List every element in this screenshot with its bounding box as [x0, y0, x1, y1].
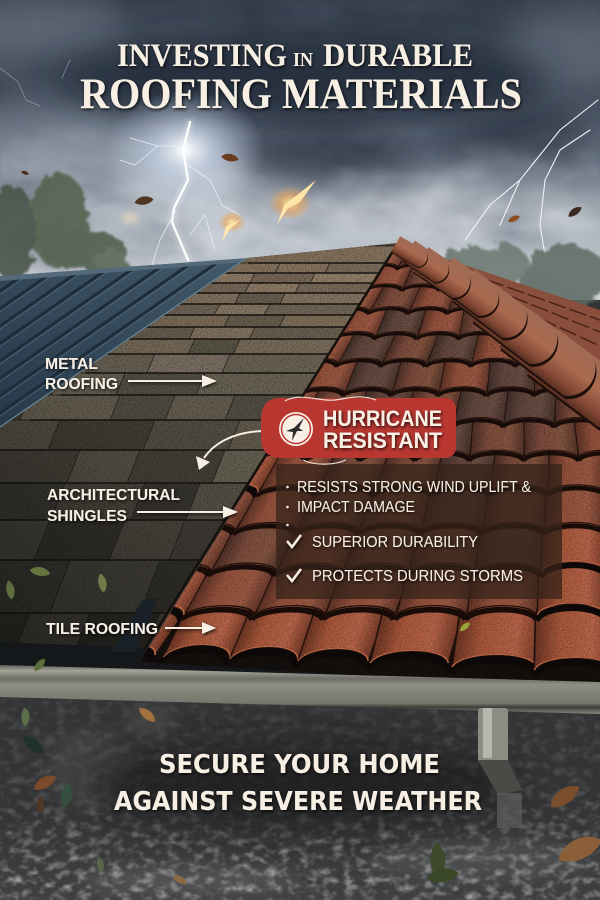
- benefit: protects during storms: PROTECTS DURING STORMS: [312, 568, 523, 585]
- title: DURABLE: [323, 38, 473, 74]
- panel: tile roofing: [140, 254, 600, 682]
- dark eave strip: [0, 598, 600, 690]
- gutter: [0, 665, 600, 714]
- benefit: wind uplift and impact: RESISTS STRONG WIND UPLIFT &: [297, 479, 532, 496]
- title: ROOFING MATERIALS: [80, 71, 522, 118]
- sky background: [0, 0, 600, 300]
- edge between shingles and tiles: [143, 243, 398, 652]
- closing tagline: [114, 750, 482, 817]
- tree left: [0, 172, 130, 280]
- label: metal roofing: ROOFING: [45, 376, 118, 393]
- title: INVESTING: [117, 38, 287, 74]
- far slope tiles behind ridge: [405, 243, 600, 420]
- bottom ground with storm debris: [0, 695, 600, 900]
- panel: architectural shingles: [0, 243, 410, 655]
- label: architectural shingles: SHINGLES: [47, 508, 127, 525]
- label: metal roofing: METAL: [45, 356, 98, 373]
- benefit: wind uplift and impact: IMPACT DAMAGE: [297, 499, 415, 516]
- label: architectural shingles: ARCHITECTURAL: [47, 487, 180, 504]
- label: architectural shingles: [47, 487, 238, 525]
- trees right: [444, 243, 600, 312]
- label: tile roofing: TILE ROOFING: [46, 621, 158, 638]
- label: metal roofing: [45, 356, 217, 393]
- closing tagline: SECURE YOUR HOME: [159, 750, 440, 780]
- glowing lightning strikes: [121, 180, 316, 242]
- benefit: wind uplift and impact: [286, 479, 532, 526]
- callout arrow: [196, 431, 262, 470]
- badge: hurricane resistant: RESISTANT: [323, 428, 443, 453]
- icon: aircraft in circle: [279, 412, 313, 446]
- closing tagline: AGAINST SEVERE WEATHER: [114, 787, 482, 817]
- title: [80, 38, 522, 118]
- lightning bolts: [0, 60, 598, 265]
- panel: metal roofing: [0, 258, 248, 428]
- badge: hurricane resistant: [261, 397, 456, 464]
- ridge cap tiles: [391, 236, 600, 440]
- benefit: superior durability: SUPERIOR DURABILITY: [312, 534, 478, 551]
- label: tile roofing: [46, 621, 216, 638]
- badge: hurricane resistant: HURRICANE: [323, 406, 442, 431]
- title: IN: [293, 49, 313, 71]
- panel: benefits list: [276, 464, 562, 599]
- downspout: [478, 708, 522, 828]
